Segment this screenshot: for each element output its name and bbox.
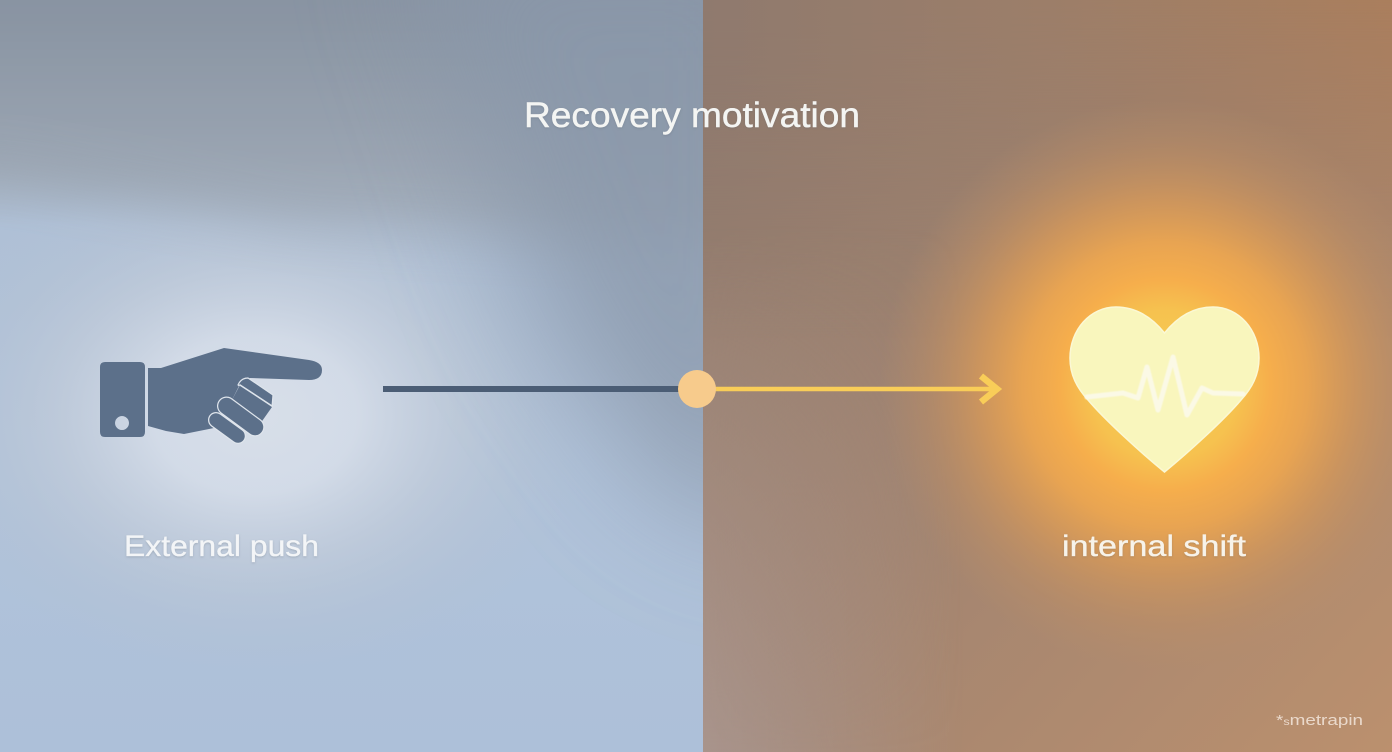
label: external push: External push bbox=[124, 530, 319, 563]
centre node bbox=[678, 370, 716, 408]
icon part: shirt cuff bbox=[100, 362, 145, 437]
icon part: curled fingers bbox=[216, 378, 273, 436]
icon: pointing hand bbox=[100, 348, 322, 437]
pulse line bbox=[1087, 357, 1243, 415]
heart bbox=[1070, 307, 1259, 472]
arrow: dark line from hand to centre bbox=[383, 386, 683, 392]
icon part: hand and index finger bbox=[148, 348, 322, 434]
label: internal shift: internal shift bbox=[1062, 530, 1247, 563]
panel: internal shift background bbox=[703, 0, 1392, 752]
title: Recovery motivation bbox=[524, 96, 860, 135]
watermark: *smetrapin bbox=[1276, 712, 1363, 729]
panel: external push background bbox=[0, 0, 703, 752]
arrow: yellow line with head bbox=[712, 376, 997, 402]
icon: glowing heart with pulse bbox=[1070, 307, 1259, 472]
